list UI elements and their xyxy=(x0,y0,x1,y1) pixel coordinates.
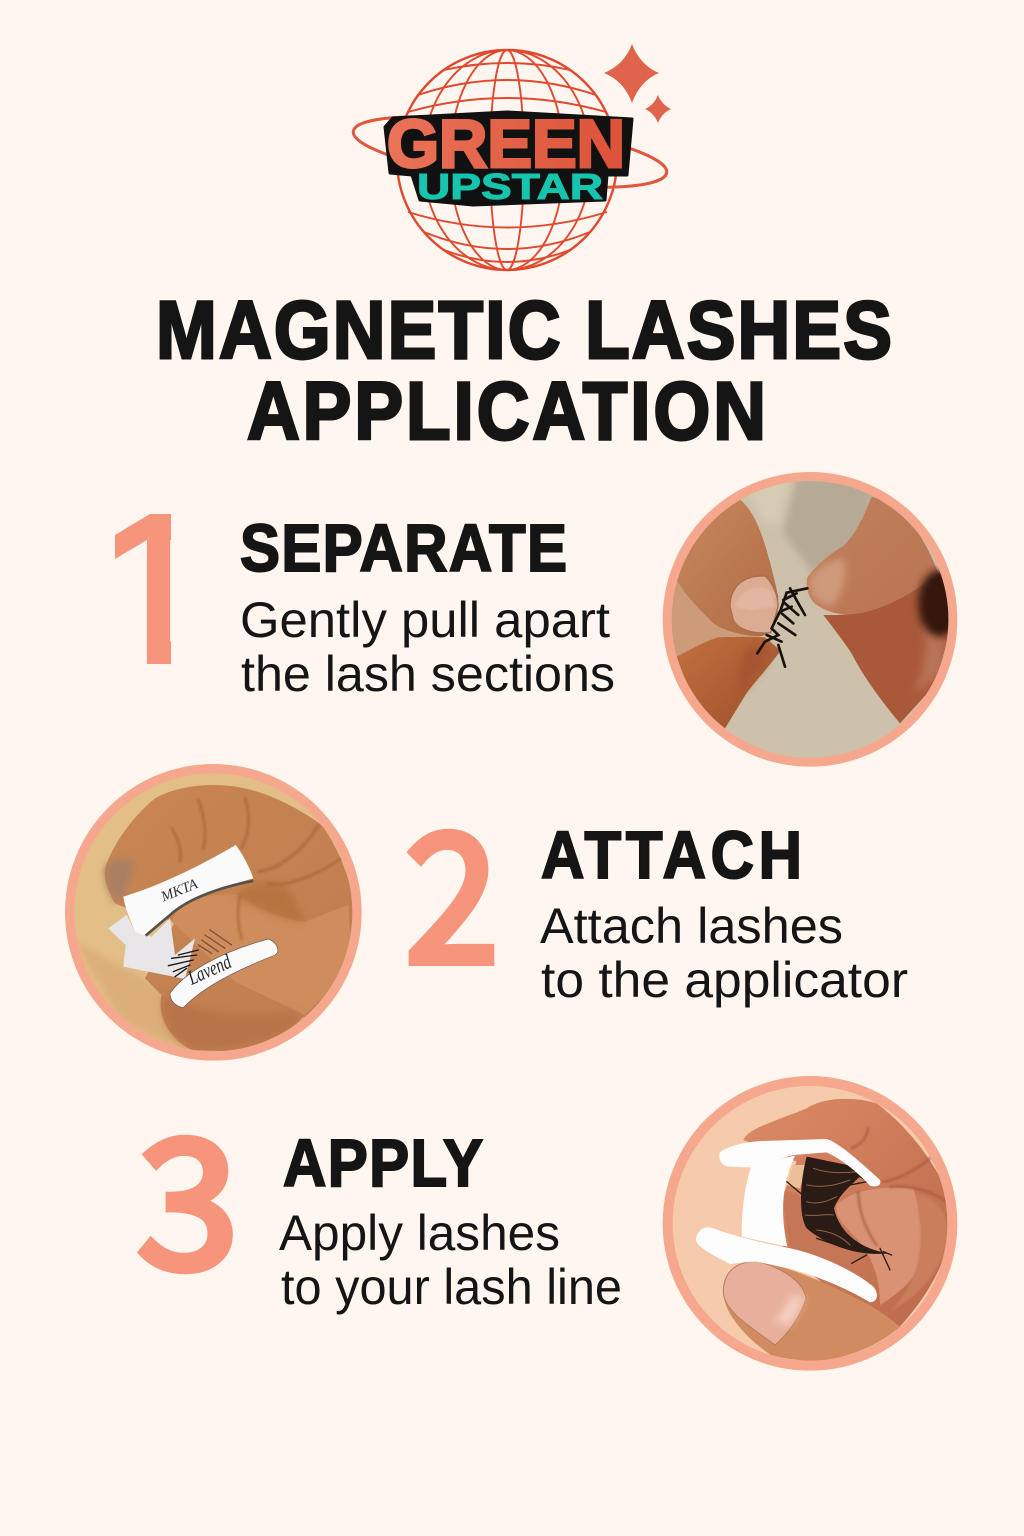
step 1: text: Gently pull apart xyxy=(240,592,610,648)
photo 1: fingers separating lashes xyxy=(663,472,962,767)
bottom applicator xyxy=(170,939,278,1008)
left upper finger xyxy=(675,499,778,636)
thumb xyxy=(723,1260,900,1362)
title xyxy=(156,285,892,457)
lashes xyxy=(198,930,232,953)
paper backing xyxy=(108,915,195,979)
white applicator xyxy=(696,1139,880,1302)
hand xyxy=(105,785,355,1051)
right upper finger xyxy=(807,497,938,614)
logo word: GREEN: GREEN xyxy=(387,106,625,182)
applicator label: Lavend: Lavend xyxy=(184,951,235,990)
step 1: text: SEPARATE xyxy=(240,512,567,586)
step 2: text xyxy=(540,819,908,1008)
right lower palm xyxy=(823,572,950,723)
title: APPLICATION xyxy=(247,366,766,457)
step 1: text xyxy=(240,512,615,702)
step 1: number: 1 xyxy=(106,434,204,717)
applicator bottom bar xyxy=(696,1227,877,1302)
step 2: number: 2 xyxy=(405,757,499,1014)
step 3: text xyxy=(279,1127,622,1315)
lash cluster xyxy=(757,588,807,667)
lashes xyxy=(801,1157,890,1254)
step 2: text: to the applicator xyxy=(541,952,908,1008)
title: MAGNETIC LASHES xyxy=(156,285,892,376)
step 3: text: to your lash line xyxy=(281,1259,622,1315)
icon: wireframe globe xyxy=(397,50,617,270)
logo word: UPSTAR: UPSTAR xyxy=(417,166,603,207)
step 3: text: APPLY xyxy=(283,1127,483,1201)
hand upper and palm xyxy=(743,1099,950,1328)
step 2: text: Attach lashes xyxy=(540,898,843,954)
logo banner xyxy=(385,112,632,205)
icon: orbit ring xyxy=(350,103,670,201)
top applicator xyxy=(123,845,253,935)
logo: Green Upstar xyxy=(350,44,671,270)
photo 2: lashes on applicator xyxy=(65,764,362,1062)
icon: small sparkle xyxy=(645,95,671,123)
left lower finger xyxy=(677,637,781,728)
step 2: text: ATTACH xyxy=(541,819,802,893)
step 3: text: Apply lashes xyxy=(279,1205,560,1261)
applicator top bar xyxy=(719,1139,880,1186)
photo 3: applying lashes xyxy=(663,1076,957,1372)
step 3: number: 3 xyxy=(137,1063,239,1320)
step 1: text: the lash sections xyxy=(241,646,615,702)
applicator label: MKTA: MKTA xyxy=(158,876,200,906)
applicator pillar xyxy=(742,1156,795,1247)
step 1: number xyxy=(115,514,171,664)
icon: large sparkle xyxy=(604,44,659,103)
